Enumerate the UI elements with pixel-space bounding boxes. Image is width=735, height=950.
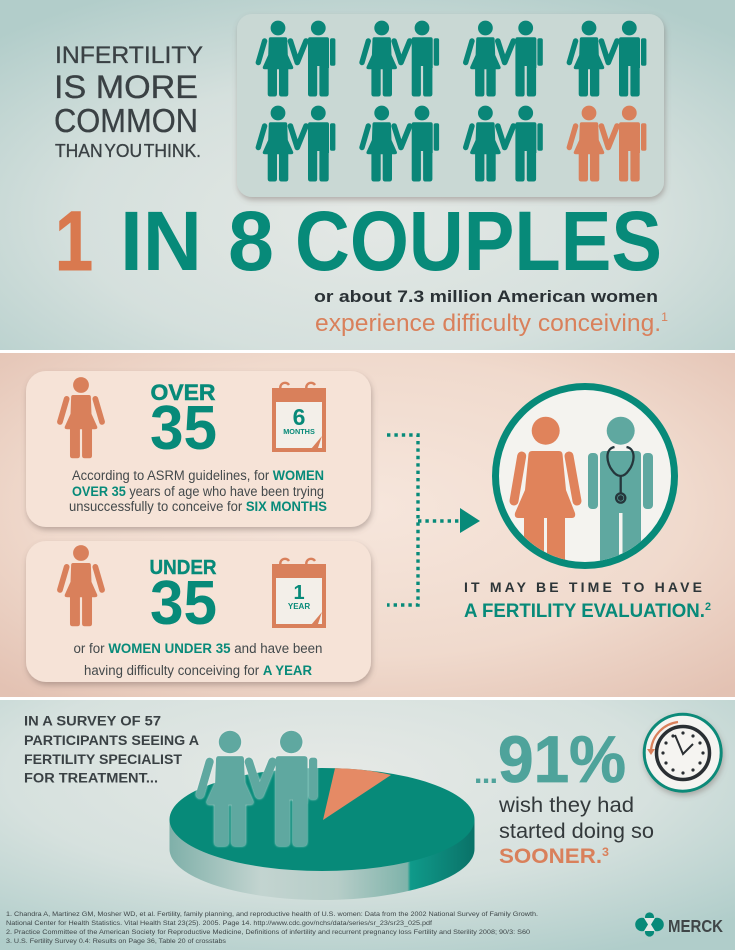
panel: bottom background — [0, 700, 735, 950]
headline: 1 in 8 couples: 8 — [228, 194, 274, 288]
icon: calendar 6 months: MONTHS — [283, 427, 315, 436]
text: over 35 guidance: unsuccessfully to conceive for SIX MONTHS — [69, 499, 327, 514]
icon: teal couples, seven of eight plus — [258, 21, 646, 181]
text: survey intro: FERTILITY SPECIALIST — [24, 752, 183, 767]
icon: woman over 35 — [60, 377, 102, 458]
logo: Merck — [635, 912, 723, 937]
text: survey intro: IN A SURVEY OF 57 — [24, 714, 161, 728]
headline: 1 in 8 couples: COUPLES — [295, 194, 662, 288]
text: experience difficulty conceiving: experience difficulty conceiving. — [315, 310, 652, 337]
text: wish they had started sooner: wish they had — [498, 793, 634, 817]
text: footnotes: 1. Chandra A, Martinez GM, Mosher WD, et al. Fertility, family planning, and reproductive health of U.S. women: Data from the 2002 National Survey of Family Growth. — [6, 911, 538, 918]
icon: calendar 1 year — [272, 559, 326, 626]
stat: 91 percent: 91% — [498, 722, 626, 796]
icon: calendar 1 year: 1 — [293, 582, 305, 604]
heading: infertility is more common: INFERTILITY — [55, 42, 203, 69]
text: wish they had started sooner: SOONER. — [499, 844, 598, 868]
text: over 35 guidance: OVER 35 years of age who have been trying — [72, 484, 324, 499]
stat: 91 percent: ... — [474, 757, 498, 790]
heading: infertility is more common: COMMON — [54, 102, 198, 139]
panel: grid of couples — [237, 14, 664, 197]
headline: 1 in 8 couples: IN — [120, 194, 202, 288]
headline: 1 in 8 couples: 1 — [55, 194, 93, 288]
text: under 35 guidance: having difficulty conceiving for A YEAR — [84, 663, 312, 678]
text: experience difficulty conceiving: 1 — [661, 310, 668, 324]
text: it may be time: IT MAY BE TIME TO HAVE — [464, 579, 702, 595]
panel: top background — [0, 0, 735, 350]
heading: under 35: 35 — [150, 569, 217, 638]
icon: calendar 6 months: 6 — [293, 404, 305, 430]
headline: 1 in 8 couples — [55, 194, 662, 288]
text: survey intro: PARTICIPANTS SEEING A — [24, 733, 199, 748]
heading: over 35: OVER — [150, 380, 216, 405]
text: footnotes: 2. Practice Committee of the American Society for Reproductive Medicine, Definitions of infertility and recurrent pregnancy loss Fertility and Sterility 2008; 90/3: S60 — [6, 929, 530, 936]
text: under 35 guidance — [74, 641, 322, 678]
chart: 3D pie — [170, 731, 474, 900]
panel: middle background — [0, 353, 735, 697]
text: survey intro: FOR TREATMENT... — [24, 770, 158, 786]
logo: Merck: MERCK — [668, 916, 723, 936]
text: wish they had started sooner: started doing so — [499, 819, 654, 843]
icon: calendar 1 year: YEAR — [288, 602, 310, 611]
heading: infertility is more common: IS MORE — [54, 69, 198, 105]
text: footnotes: National Center for Health Statistics. Vital Health Stat 23(25). 2005. Page 14. http://www.cdc.gov/nchs/data/series/sr_23/sr23_025.pdf — [6, 920, 432, 927]
icon: woman under 35 — [60, 545, 102, 626]
panel: under 35 — [26, 541, 371, 682]
text: a fertility evaluation: 2 — [705, 601, 711, 613]
text: over 35 guidance: According to ASRM guidelines, for WOMEN — [72, 468, 324, 483]
text: a fertility evaluation: A FERTILITY EVALUATION. — [464, 601, 709, 622]
text: footnotes — [6, 911, 538, 945]
heading: under 35: UNDER — [150, 557, 217, 579]
text: over 35 guidance — [69, 468, 327, 514]
icon: calendar 6 months — [272, 383, 326, 450]
heading: infertility is more common — [54, 42, 203, 161]
heading: over 35: 35 — [150, 394, 217, 463]
icon: woman and doctor in circle — [496, 386, 674, 570]
text: footnotes: 3. U.S. Fertility Survey 0.4: Results on Page 36, Table 20 of crosstabs — [6, 938, 227, 945]
text: survey intro — [24, 714, 199, 786]
chart slice: orange wedge — [323, 768, 391, 820]
icon: woman figure — [514, 417, 577, 570]
text: wish they had started sooner — [498, 793, 654, 868]
text: 7.3 million women: or about 7.3 million American women — [314, 288, 658, 306]
arrow: dotted connector to evaluation — [387, 435, 480, 605]
icon: couple on pie — [200, 731, 317, 846]
icon: orange couple — [569, 106, 646, 182]
icon: clock — [644, 714, 721, 791]
heading: infertility is more common: THAN YOU THINK. — [55, 141, 201, 161]
text: wish they had started sooner: 3 — [602, 845, 609, 859]
icon: doctor figure — [588, 417, 653, 570]
panel: over 35 — [26, 371, 371, 527]
icon: stethoscope — [607, 447, 634, 503]
text: under 35 guidance: or for WOMEN UNDER 35 and have been — [74, 641, 322, 656]
